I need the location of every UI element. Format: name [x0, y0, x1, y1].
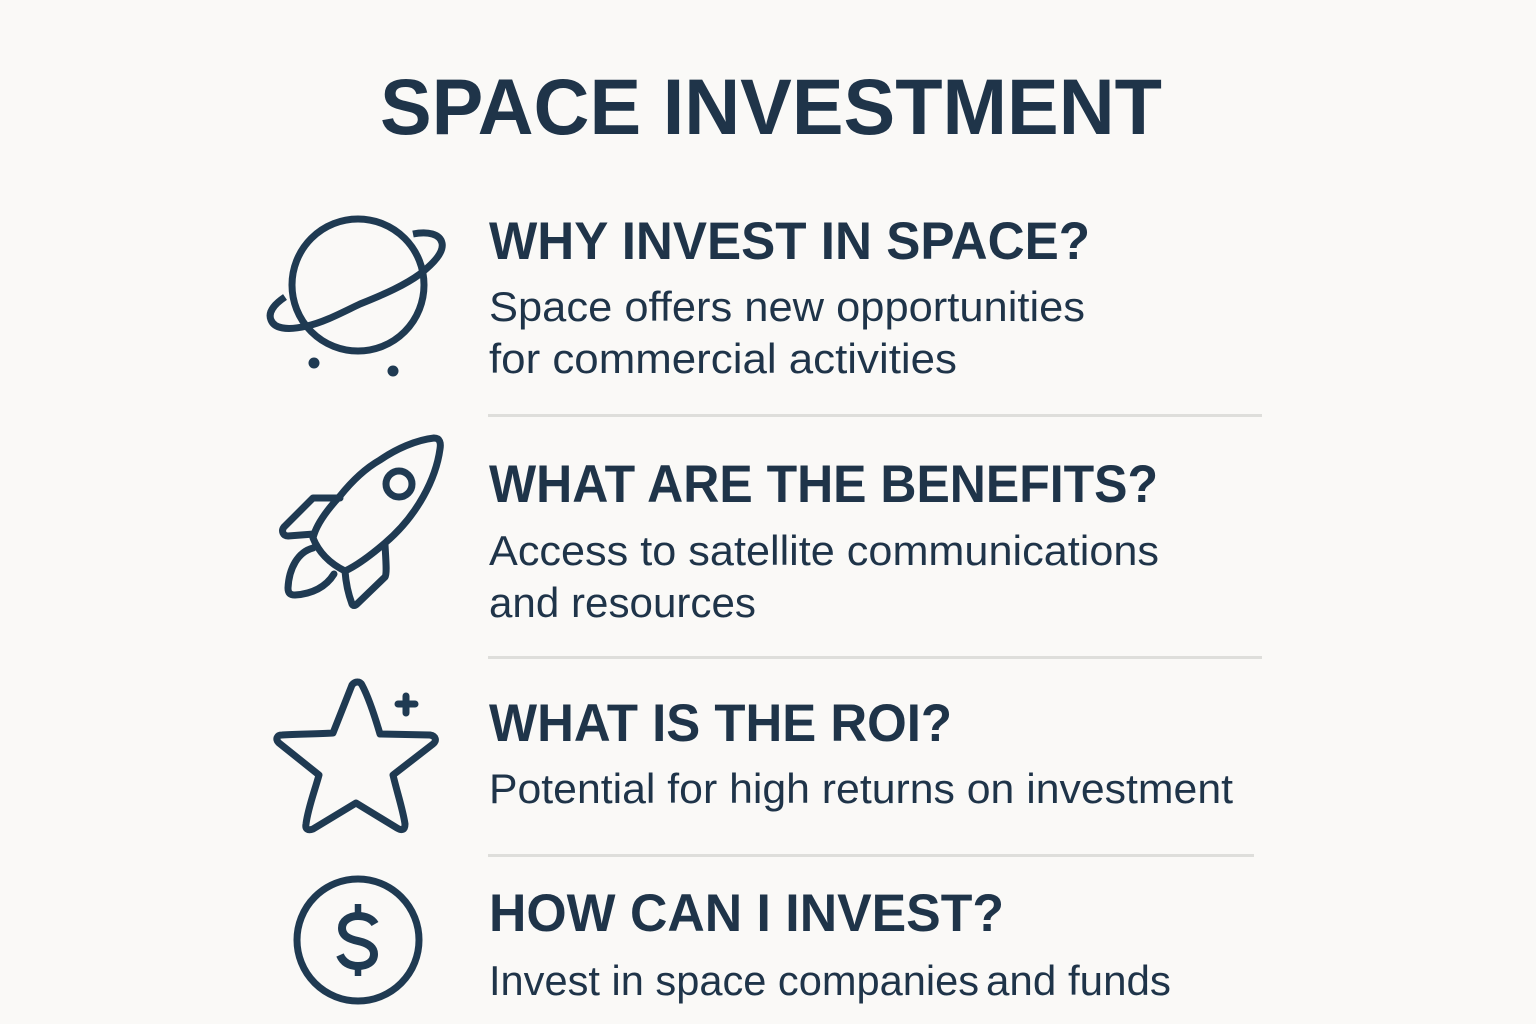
heading: roi: WHAT IS THE ROI?	[489, 694, 952, 753]
text: benefits description: Access to satellite communications	[489, 527, 1159, 574]
section: why invest in space	[270, 212, 1090, 382]
section: benefits	[283, 438, 1159, 626]
section: how to invest	[297, 879, 1171, 1004]
icon: rocket	[283, 438, 440, 606]
section: roi	[277, 682, 1233, 830]
heading: why invest in space: WHY INVEST IN SPACE?	[489, 212, 1090, 271]
text: benefits description: and resources	[489, 579, 756, 626]
text: benefits description	[489, 527, 1159, 626]
text: why invest description: Space offers new opportunities	[489, 283, 1085, 330]
icon: dollar coin	[297, 879, 419, 1001]
title: SPACE INVESTMENT	[380, 62, 1162, 151]
heading: how can i invest: HOW CAN I INVEST?	[489, 884, 1004, 943]
text: why invest description	[489, 283, 1085, 382]
icon: ringed planet	[270, 219, 442, 376]
text: roi description: Potential for high returns on investment	[489, 765, 1233, 812]
heading: benefits: WHAT ARE THE BENEFITS?	[489, 455, 1158, 514]
text: how to invest description: and funds	[986, 957, 1171, 1004]
text: how to invest description: Invest in space companies	[489, 957, 979, 1004]
icon: star with plus	[277, 682, 435, 830]
text: why invest description: for commercial activities	[489, 335, 957, 382]
